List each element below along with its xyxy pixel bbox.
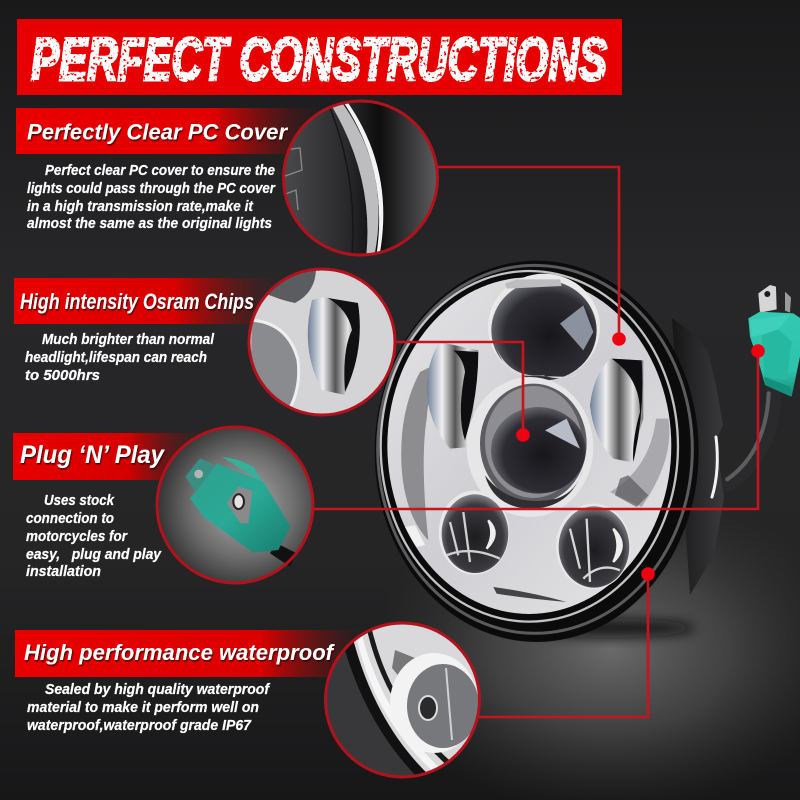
lower right lens	[556, 504, 631, 589]
zoom circle: chips	[249, 268, 395, 420]
heading: High intensity Osram Chips	[20, 289, 254, 314]
title banner	[17, 19, 622, 95]
headlight with connector	[375, 261, 800, 642]
line: waterproof	[479, 567, 655, 717]
top projector lens	[488, 274, 600, 380]
description: Perfect clear PC cover to ensure the	[45, 163, 275, 179]
right mirror lens	[590, 359, 643, 462]
left mirror lens	[427, 342, 478, 449]
description: easy, plug and play	[26, 547, 162, 563]
description: almost the same as the original lights	[27, 216, 272, 232]
line: plug and play	[312, 344, 765, 509]
description: connection to	[26, 511, 114, 527]
zoom circle: PC cover	[283, 100, 438, 258]
lower left lens	[439, 491, 509, 575]
banner	[14, 278, 282, 324]
description: motorcycles for	[26, 529, 128, 545]
panel: high performance waterproof	[15, 623, 480, 780]
zoom circle: connector	[157, 427, 313, 583]
description: installation	[26, 564, 101, 580]
panel: high intensity osram chips	[14, 268, 395, 420]
banner	[15, 630, 366, 677]
line: PC cover	[437, 167, 626, 346]
banner	[13, 433, 205, 480]
line: osram chips	[394, 342, 530, 442]
cable	[727, 388, 774, 483]
connector plug	[748, 285, 800, 397]
description: waterproof,waterproof grade IP67	[27, 718, 252, 734]
description: material to make it perform well on	[27, 700, 259, 716]
heading: High performance waterproof	[24, 640, 336, 665]
heading: Perfectly Clear PC Cover	[27, 120, 288, 144]
rear housing	[672, 318, 724, 595]
description: Sealed by high quality waterproof	[45, 682, 271, 698]
zoom circle: waterproof	[325, 623, 480, 780]
description: in a high transmission rate,make it	[27, 199, 254, 215]
center projector lens	[467, 377, 593, 517]
panel: perfectly clear PC cover	[16, 100, 438, 258]
heading: Plug ‘N’ Play	[20, 441, 165, 469]
banner	[16, 108, 321, 154]
headlight shadow	[525, 619, 695, 637]
callout lines and dots	[312, 167, 765, 717]
description: headlight,lifespan can reach	[25, 350, 207, 366]
panel: plug n play	[13, 427, 313, 583]
description: lights could pass through the PC cover	[27, 181, 276, 197]
lamp rings and face	[375, 261, 699, 642]
description: to 5000hrs	[25, 368, 100, 384]
top tab	[505, 279, 562, 289]
description: Much brighter than normal	[42, 332, 215, 348]
description: Uses stock	[44, 493, 115, 509]
